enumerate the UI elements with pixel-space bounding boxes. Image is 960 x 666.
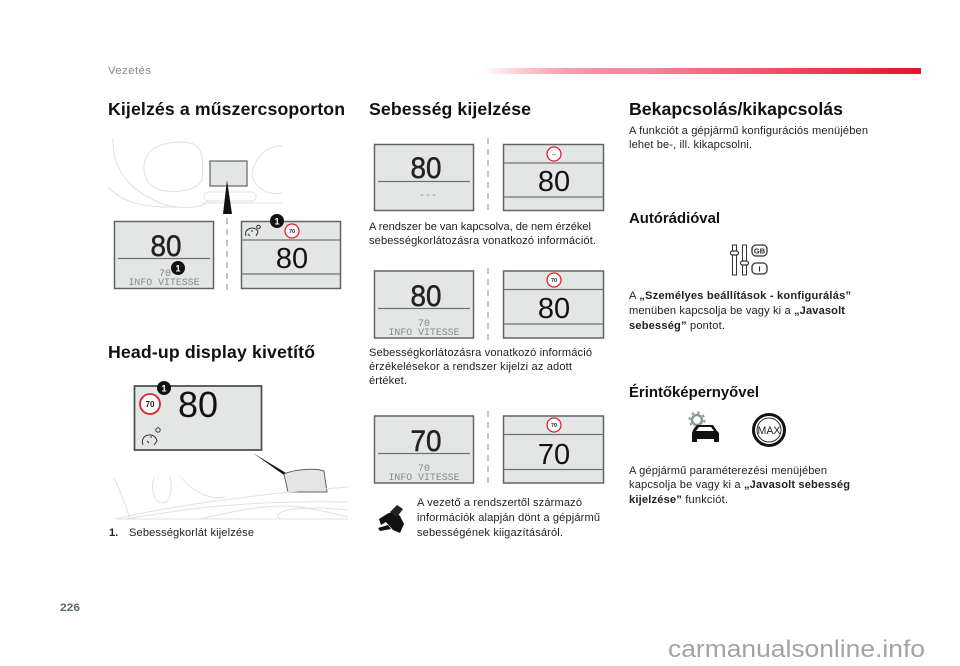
icon: MAX bbox=[754, 414, 784, 446]
text: personal settings: sebesség” pontot. bbox=[629, 320, 725, 332]
text: vehicle parameters menu: kijelzése” funkciót. bbox=[629, 494, 728, 506]
display row 1 left: --- bbox=[419, 191, 437, 202]
display: cluster left: INFO VITESSE bbox=[128, 278, 200, 289]
heading: with car radio: Autórádióval bbox=[629, 211, 720, 227]
display row 1 left: 80 bbox=[410, 152, 442, 185]
display row 3 right: 70 bbox=[538, 439, 570, 471]
icon: car with gear bbox=[690, 412, 719, 442]
display row 1 right: -- bbox=[552, 152, 556, 158]
display row 2 left: 80 bbox=[410, 280, 442, 313]
display row 3 right bbox=[504, 416, 604, 483]
text: information detected: érzékelésekor a rendszer kijelzi az adott bbox=[369, 361, 572, 373]
display: cluster right: 80 bbox=[276, 243, 308, 275]
display: head-up bbox=[134, 381, 262, 450]
display row 3 right: 70 bbox=[551, 423, 557, 429]
display row 3 left bbox=[374, 416, 474, 484]
display row 2 left: 70 bbox=[418, 319, 430, 330]
display row 2 right: 70 bbox=[551, 278, 557, 284]
display row 3 left: 70 bbox=[410, 425, 442, 458]
display row 2 right bbox=[504, 271, 604, 338]
heading: head-up display: Head-up display kivetítő bbox=[108, 342, 315, 362]
display row 2 left: INFO VITESSE bbox=[388, 328, 460, 339]
text: personal settings: A „Személyes beállítások - konfigurálás” bbox=[629, 290, 851, 302]
text: personal settings bbox=[629, 290, 851, 332]
text: information detected: értéket. bbox=[369, 375, 407, 387]
icon: settings sliders bbox=[730, 245, 767, 275]
text: no speed information: sebességkorlátozásra vonatkozó információt. bbox=[369, 235, 596, 247]
icon: settings sliders: GB bbox=[754, 246, 766, 256]
text: intro on/off: lehet be-, ill. kikapcsolni. bbox=[629, 139, 752, 151]
page number: 226 bbox=[60, 602, 80, 614]
text: intro on/off: A funkciót a gépjármű konfigurációs menüjében bbox=[629, 125, 868, 137]
text: no speed information bbox=[369, 221, 596, 247]
display row 1 right: 80 bbox=[538, 166, 570, 198]
text: no speed information: A rendszer be van kapcsolva, de nem érzékel bbox=[369, 221, 591, 233]
display row 2 left bbox=[374, 271, 474, 339]
illustration: windscreen with projector bbox=[114, 453, 348, 519]
heading: speed display: Sebesség kijelzése bbox=[369, 99, 531, 119]
text: information detected bbox=[369, 347, 592, 387]
header gradient bar bbox=[484, 68, 921, 74]
display: cluster left: 70 bbox=[159, 269, 171, 280]
text: driver decides: sebességének kiigazításáról. bbox=[417, 527, 563, 539]
heading: on/off: Bekapcsolás/kikapcsolás bbox=[629, 99, 843, 119]
section label: Vezetés bbox=[108, 65, 151, 77]
display: head-up: 80 bbox=[178, 384, 218, 425]
text: vehicle parameters menu: A gépjármű paraméterezési menüjében bbox=[629, 465, 827, 477]
display: cluster right bbox=[242, 214, 340, 288]
display row 1 left bbox=[374, 144, 474, 210]
text: intro on/off bbox=[629, 125, 868, 151]
display: cluster left bbox=[114, 222, 214, 289]
icon: hand adjusting bbox=[378, 505, 404, 533]
display: cluster left: 1 bbox=[175, 264, 181, 274]
display row 3 left: INFO VITESSE bbox=[388, 473, 460, 484]
heading: instrument cluster: Kijelzés a műszercsoporton bbox=[108, 99, 345, 119]
text: information detected: Sebességkorlátozásra vonatkozó információ bbox=[369, 347, 592, 359]
display: cluster left: 80 bbox=[150, 230, 182, 263]
display: head-up: 70 bbox=[146, 400, 155, 409]
display row 2 right: 80 bbox=[538, 293, 570, 325]
illustration: dashboard bbox=[108, 138, 282, 290]
heading: touch screen: Érintőképernyővel bbox=[629, 384, 759, 401]
icon: MAX: MAX bbox=[758, 425, 781, 437]
icon: settings sliders: I bbox=[758, 264, 761, 274]
text: vehicle parameters menu bbox=[629, 465, 850, 506]
display: cluster right: 1 bbox=[274, 216, 280, 226]
legend: item 1: 1. bbox=[109, 527, 118, 539]
watermark text: carmanualsonline.info bbox=[668, 636, 925, 663]
dashed separators bbox=[487, 138, 489, 488]
text: driver decides: információk alapján dönt a gépjármű bbox=[417, 512, 600, 524]
display: cluster right: 70 bbox=[289, 229, 295, 235]
text: personal settings: menüben kapcsolja be vagy ki a „Javasolt bbox=[629, 305, 845, 317]
text: driver decides: A vezető a rendszertől származó bbox=[417, 497, 582, 509]
legend: item 1: Sebességkorlát kijelzése bbox=[129, 527, 254, 539]
display: head-up: 1 bbox=[161, 384, 167, 394]
text: vehicle parameters menu: kapcsolja be vagy ki a „Javasolt sebesség bbox=[629, 479, 850, 491]
display row 1 right bbox=[504, 144, 604, 210]
display row 3 left: 70 bbox=[418, 464, 430, 475]
text: driver decides bbox=[417, 497, 600, 539]
